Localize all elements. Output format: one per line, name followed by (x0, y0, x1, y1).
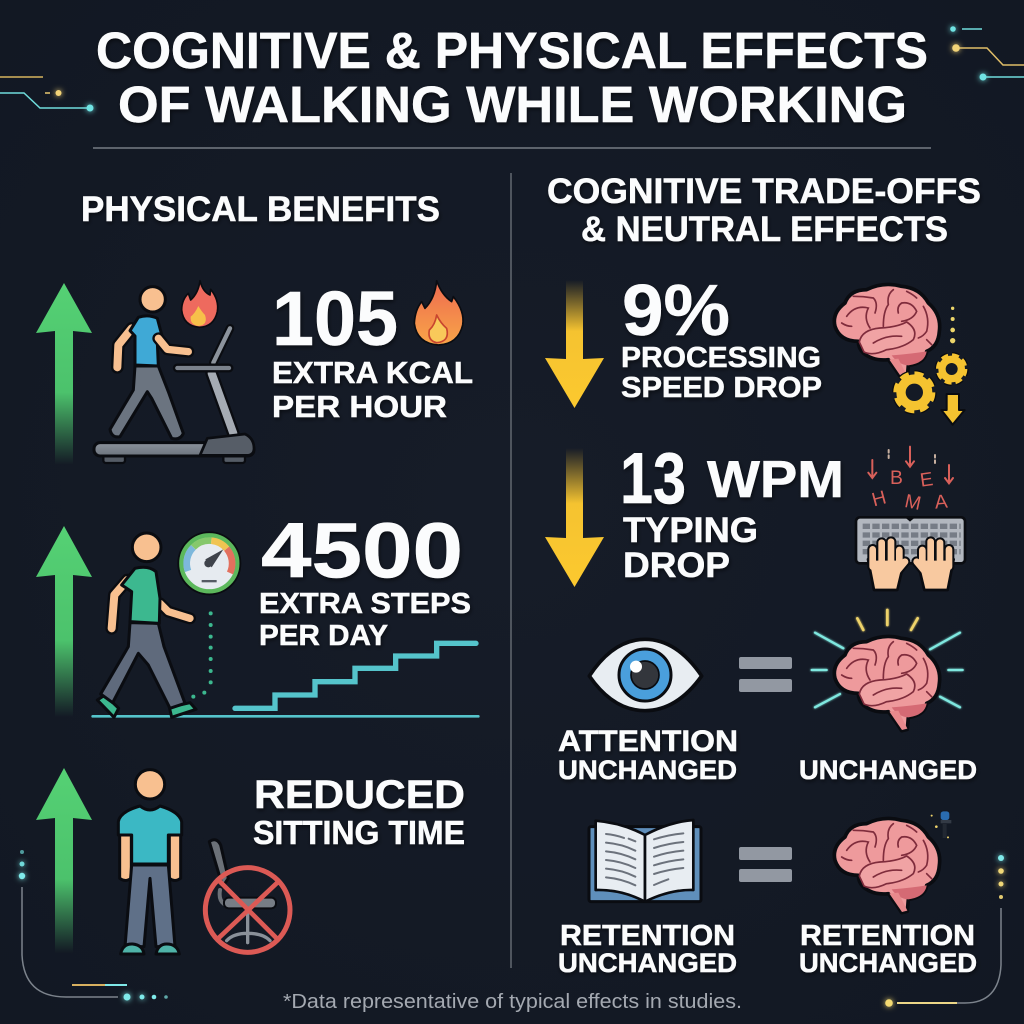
icon: person on treadmill (94, 281, 254, 463)
icon: glowing brain (812, 610, 963, 731)
icon: standing person (118, 770, 182, 954)
stat: 105 extra kcal: PER HOUR (272, 390, 447, 424)
heading: cognitive trade-offs: & NEUTRAL EFFECTS (581, 210, 948, 249)
heading: physical benefits: PHYSICAL BENEFITS (81, 190, 440, 229)
labels: attention unchanged: UNCHANGED (558, 755, 737, 785)
labels: attention unchanged: ATTENTION (558, 725, 738, 758)
stat: 9 percent processing speed drop (621, 271, 822, 404)
icon: keyboard with hands and letters: E (919, 469, 935, 492)
stat: 9 percent processing speed drop: PROCESSING (621, 342, 821, 374)
icon: crossed out chair (205, 840, 290, 952)
arrow: down processing (545, 280, 604, 408)
stat: 13 wpm typing drop: DROP (623, 546, 730, 585)
labels: retention unchanged: UNCHANGED (799, 948, 977, 978)
stat: 13 wpm typing drop: 13 (620, 439, 686, 519)
stat: 9 percent processing speed drop: 9% (622, 271, 730, 351)
labels: retention unchanged: RETENTION (560, 920, 735, 952)
labels: attention unchanged (558, 725, 977, 785)
labels: attention unchanged: UNCHANGED (799, 755, 977, 785)
panel: cognitive trade-offs and neutral effects (545, 172, 981, 978)
icon: brain retention (834, 811, 951, 913)
icon: keyboard with hands and letters: M (903, 491, 923, 515)
stat: 105 extra kcal: 105 (272, 276, 398, 362)
icon: equals sign attention (739, 657, 792, 692)
stat: 105 extra kcal (272, 276, 473, 424)
title: COGNITIVE & PHYSICAL EFFECTS (96, 22, 928, 79)
icon: keyboard with hands and letters: B (890, 468, 903, 489)
icon: brain with gears (834, 284, 965, 425)
title: OF WALKING WHILE WORKING (118, 76, 907, 133)
icon: keyboard with hands and letters (856, 447, 965, 590)
stat: 13 wpm typing drop (620, 439, 844, 585)
arrow: up steps (36, 526, 92, 717)
icon: open book (589, 820, 701, 902)
icon: eye (589, 639, 702, 711)
icon: keyboard with hands and letters: A (934, 492, 949, 514)
stat: 4500 extra steps (259, 506, 471, 652)
arrow: up calories (36, 283, 92, 465)
stat: 13 wpm typing drop: WPM (707, 451, 844, 509)
stat: 4500 extra steps: PER DAY (259, 620, 388, 652)
arrow: down typing (545, 448, 604, 587)
footnote: *Data representative of typical effects in studies. (283, 991, 742, 1013)
arrow: up reduced sitting (36, 768, 92, 953)
decoration: bottom right circuit (885, 855, 1004, 1007)
title (96, 22, 928, 133)
stat: reduced sitting time: SITTING TIME (253, 814, 465, 851)
stat: reduced sitting time (253, 773, 465, 851)
stat: 4500 extra steps: EXTRA STEPS (259, 588, 471, 620)
heading: cognitive trade-offs (547, 172, 981, 249)
stat: reduced sitting time: REDUCED (254, 773, 465, 817)
stat: 4500 extra steps: 4500 (261, 506, 463, 594)
stat: 13 wpm typing drop: TYPING (623, 511, 758, 550)
icon: flame (414, 281, 463, 345)
stat: 9 percent processing speed drop: SPEED DROP (621, 372, 822, 404)
icon: keyboard with hands and letters: H (870, 487, 889, 511)
icon: walking person with gauge (97, 531, 241, 717)
decoration: top left circuit (0, 77, 94, 112)
decoration: top right circuit (950, 26, 1024, 80)
icon: equals sign retention (739, 847, 792, 882)
labels: retention unchanged: RETENTION (800, 920, 975, 952)
stat: 105 extra kcal: EXTRA KCAL (272, 356, 473, 390)
labels: retention unchanged: UNCHANGED (558, 948, 737, 978)
icon: stairs and ground line (93, 643, 478, 716)
labels: retention unchanged (558, 920, 977, 978)
panel: physical benefits (36, 190, 478, 954)
heading: cognitive trade-offs: COGNITIVE TRADE-OFFS (547, 172, 981, 211)
decoration: bottom left circuit (19, 850, 168, 1000)
